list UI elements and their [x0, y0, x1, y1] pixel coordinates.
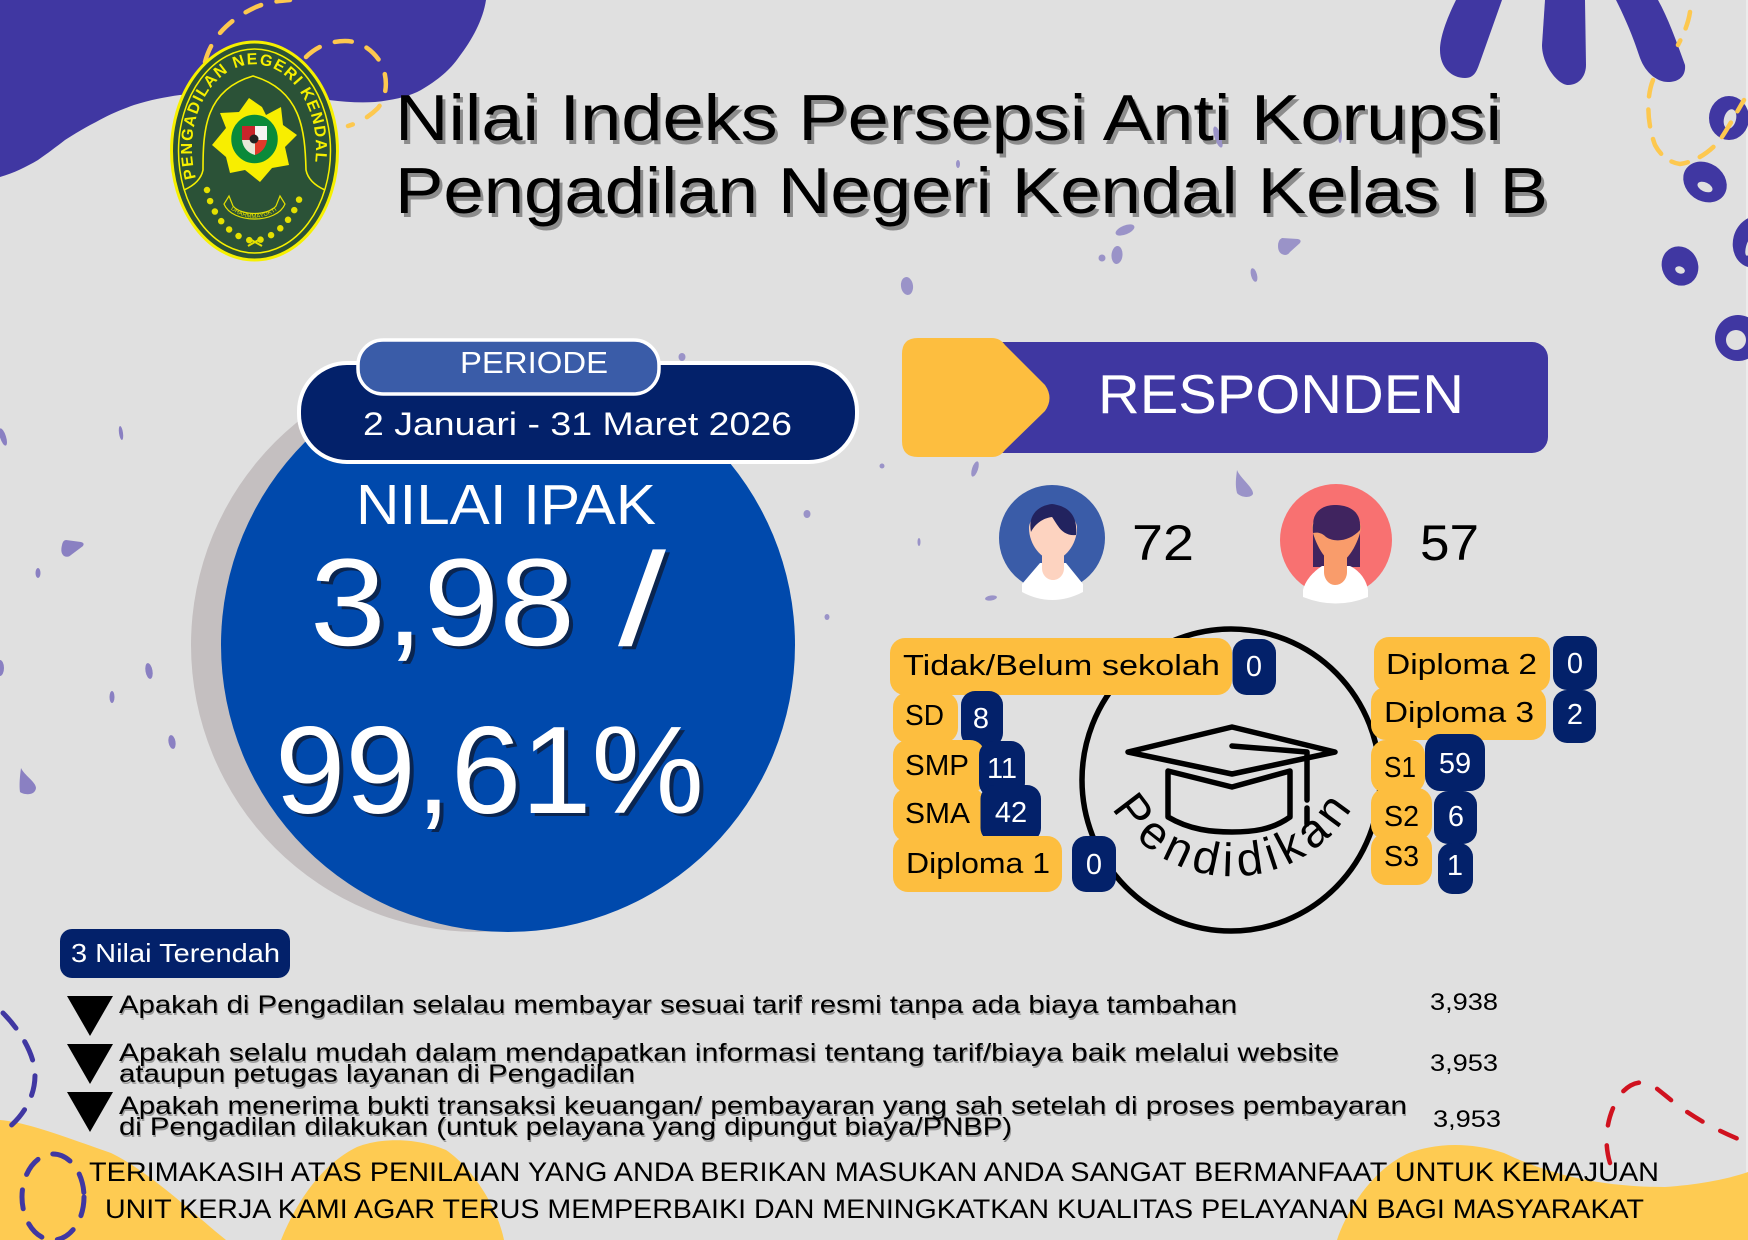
title: Nilai Indeks Persepsi Anti Korupsi [395, 81, 1502, 154]
label: S3 [1371, 833, 1473, 894]
item 3 text: Apakah menerima bukti transaksi keuangan/ pembayaran yang sah setelah di proses pembayaran [119, 1092, 1407, 1120]
label: S1: 59 [1439, 748, 1471, 780]
label: SD [893, 691, 1003, 747]
icon: graduation cap [1128, 727, 1335, 832]
item 3 text: di Pengadilan dilakukan (untuk pelayana yang dipungut biaya/PNBP) [119, 1113, 1012, 1141]
item 1 text: Apakah di Pengadilan selalau membayar sesuai tarif resmi tanpa ada biaya tambahan [119, 991, 1237, 1019]
education labels: left column [890, 638, 1276, 892]
label: SMP: SMP [905, 750, 969, 782]
score: 99,61%: 99,61% [275, 702, 704, 840]
label: S3: S3 [1384, 841, 1419, 873]
label: SMP [893, 740, 1025, 797]
footer thank-you message: TERIMAKASIH ATAS PENILAIAN YANG ANDA BERIKAN MASUKAN ANDA SANGAT BERMANFAAT UNTUK KEMAJUAN [89, 1157, 1659, 1187]
icon: male respondent [999, 485, 1105, 600]
label: diploma 3: 2 [1567, 699, 1583, 731]
value 3: 3,953 [1433, 1106, 1501, 1133]
panel: date pill: 2 Januari - 31 Maret 2026 [363, 406, 792, 442]
label: SMA: 42 [995, 797, 1027, 829]
label: diploma 2: 0 [1567, 648, 1583, 680]
decorative blob: top left [0, 0, 486, 177]
label: S2: 6 [1448, 801, 1464, 833]
heading: 3 nilai terendah: 3 Nilai Terendah [71, 938, 280, 968]
item 2 text: ataupun petugas layanan di Pengadilan [119, 1060, 635, 1088]
score: 99,61%: 99,61% [279, 705, 708, 843]
curved label: pendidikan: Pendidikan [1114, 792, 1350, 876]
panel: date pill [299, 363, 857, 462]
label: S1 [1371, 734, 1485, 793]
label: S3: 1 [1447, 850, 1463, 882]
label: diploma 3 [1371, 687, 1596, 743]
decorative rings: right edge [1655, 96, 1748, 361]
label: tidak/belum sekolah: Tidak/Belum sekolah [903, 650, 1220, 682]
score: 3,98 [310, 526, 670, 676]
label: SD: 8 [973, 703, 989, 735]
item 3 text [119, 1092, 1407, 1141]
footer thank-you message: UNIT KERJA KAMI AGAR TERUS MEMPERBAIKI DAN MENINGKATKAN KUALITAS PELAYANAN BAGI MASYARAKAT [105, 1194, 1644, 1224]
label: SMA: SMA [905, 798, 971, 830]
label: S1: S1 [1384, 752, 1416, 784]
panel: periode tab: PERIODE [460, 345, 608, 380]
panel: pendidikan circle [1079, 626, 1378, 934]
list: lowest scoring items [67, 989, 1501, 1141]
decorative dashed loop: top left [205, 0, 386, 126]
arrow: item 2 [67, 1044, 113, 1084]
decorative purple specks [0, 125, 1342, 794]
score: 3,98: / [622, 529, 670, 676]
count: male: 72 [1132, 515, 1194, 571]
panel: periode tab [358, 340, 659, 394]
decorative dashed arc: left purple [3, 1013, 35, 1132]
title: Pengadilan Negeri Kendal Kelas I B [395, 154, 1548, 227]
arrow: item 3 [67, 1092, 113, 1132]
label: diploma 2 [1374, 636, 1597, 692]
label: S2: S2 [1384, 801, 1419, 833]
score: 3,98: 3,98 [314, 537, 579, 675]
heading: 3 nilai terendah [60, 929, 290, 978]
label: S2 [1371, 788, 1477, 844]
logo: Pengadilan Negeri Kendal emblem: PENGADILAN NEGERI KENDAL [180, 53, 327, 180]
panel: responden banner [902, 338, 1548, 457]
label: tidak/belum sekolah: 0 [1246, 651, 1262, 683]
label: diploma 2: Diploma 2 [1386, 649, 1537, 681]
decorative dashed ellipse: bottom left purple [22, 1154, 84, 1240]
item 2 text: Apakah selalu mudah dalam mendapatkan informasi tentang tarif/biaya baik melalui website [119, 1039, 1339, 1067]
education labels: right column [1371, 636, 1597, 894]
decorative dashed arc: bottom right red [1607, 1082, 1748, 1163]
decorative dashed loop: top right [1648, 12, 1744, 164]
footer thank-you message [89, 1157, 1659, 1224]
label: diploma 1: 0 [1086, 849, 1102, 881]
arrow: item 1 [67, 996, 113, 1036]
icon: female respondent [1280, 484, 1392, 604]
label: SMA [893, 785, 1041, 842]
score: 3,98: / [618, 526, 666, 673]
panel: responden banner: RESPONDEN [1098, 363, 1464, 425]
label: diploma 3: Diploma 3 [1384, 697, 1534, 729]
item 2 text [119, 1039, 1339, 1088]
heading: nilai ipak: NILAI IPAK [356, 473, 656, 537]
score: 3,98: 3,98 [310, 534, 575, 672]
label: tidak/belum sekolah [890, 638, 1276, 695]
logo: Pengadilan Negeri Kendal emblem: DHARMMAYUKTI [231, 206, 276, 218]
decorative yellow blobs: bottom [0, 1120, 1748, 1240]
label: SD: SD [905, 700, 944, 732]
panel: nilai IPAK circle [191, 358, 795, 932]
decorative fingers: top right [1440, 0, 1685, 85]
label: SMP: 11 [987, 753, 1017, 785]
title [395, 81, 1548, 227]
count: female: 57 [1420, 515, 1479, 571]
label: diploma 1 [893, 836, 1116, 892]
value 1: 3,938 [1430, 989, 1498, 1016]
logo: Pengadilan Negeri Kendal emblem [170, 40, 339, 262]
label: diploma 1: Diploma 1 [906, 848, 1050, 880]
value 2: 3,953 [1430, 1050, 1498, 1077]
